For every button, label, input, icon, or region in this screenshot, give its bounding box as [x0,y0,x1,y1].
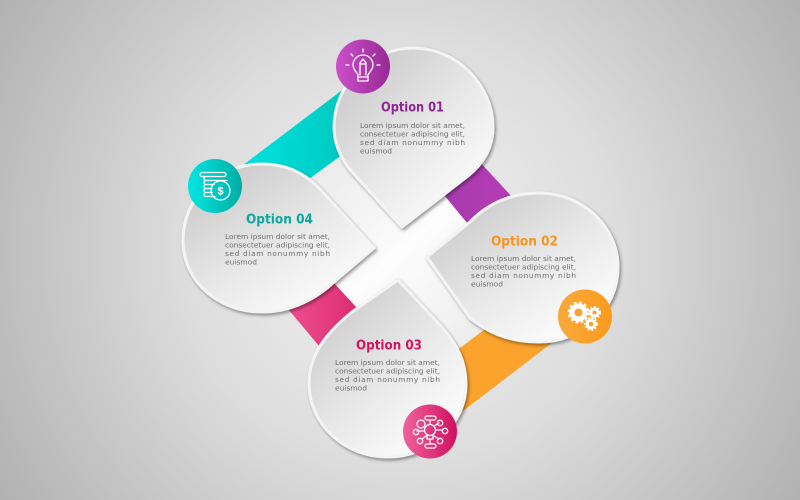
body text: consectetuer adipiscing elit, [335,366,440,376]
dollar sign: $ [217,186,224,198]
body text: sed diam nonummy nibh [225,249,330,258]
body text: euismod [335,384,367,392]
heading: Option 03 [356,338,422,354]
drop 03 [309,280,466,457]
drop 04 [183,164,374,312]
heading: Option 04 [246,212,313,228]
body text: euismod [360,146,392,156]
icon: network [403,404,457,458]
body text: sed diam nonummy nibh [471,271,576,280]
body text: Lorem ipsum dolor sit amet, [225,232,330,241]
connector strips [310,156,488,348]
band: purple [444,160,514,224]
panel: option 02 [427,193,618,342]
body text: consectetuer adipiscing elit, [360,130,465,138]
body text: consectetuer adipiscing elit, [225,240,330,250]
body text: euismod [225,258,257,266]
body text: Lorem ipsum dolor sit amet, [471,254,576,263]
drop 02 [427,193,618,342]
icon: gears [558,290,612,344]
drop 01 [334,48,493,227]
body text: consectetuer adipiscing elit, [471,262,576,272]
heading: Option 02 [491,234,558,250]
body text: Lorem ipsum dolor sit amet, [360,121,465,130]
panel: option 01 [334,48,493,227]
heading: Option 01 [381,100,444,116]
body text: sed diam nonummy nibh [360,138,465,147]
body text [471,254,576,288]
panel: option 03 [309,280,466,457]
panel: option 04 [183,164,374,312]
icon: light bulb with pencil [336,40,390,94]
body text: Lorem ipsum dolor sit amet, [335,358,440,367]
body text [225,232,330,266]
band: teal [243,88,350,186]
body text [335,358,440,392]
body text: euismod [471,280,503,288]
band: pink [288,282,357,346]
icon: coins with dollar [188,159,242,213]
body text: sed diam nonummy nibh [335,375,440,384]
body text [360,121,465,156]
band: orange [450,327,553,411]
